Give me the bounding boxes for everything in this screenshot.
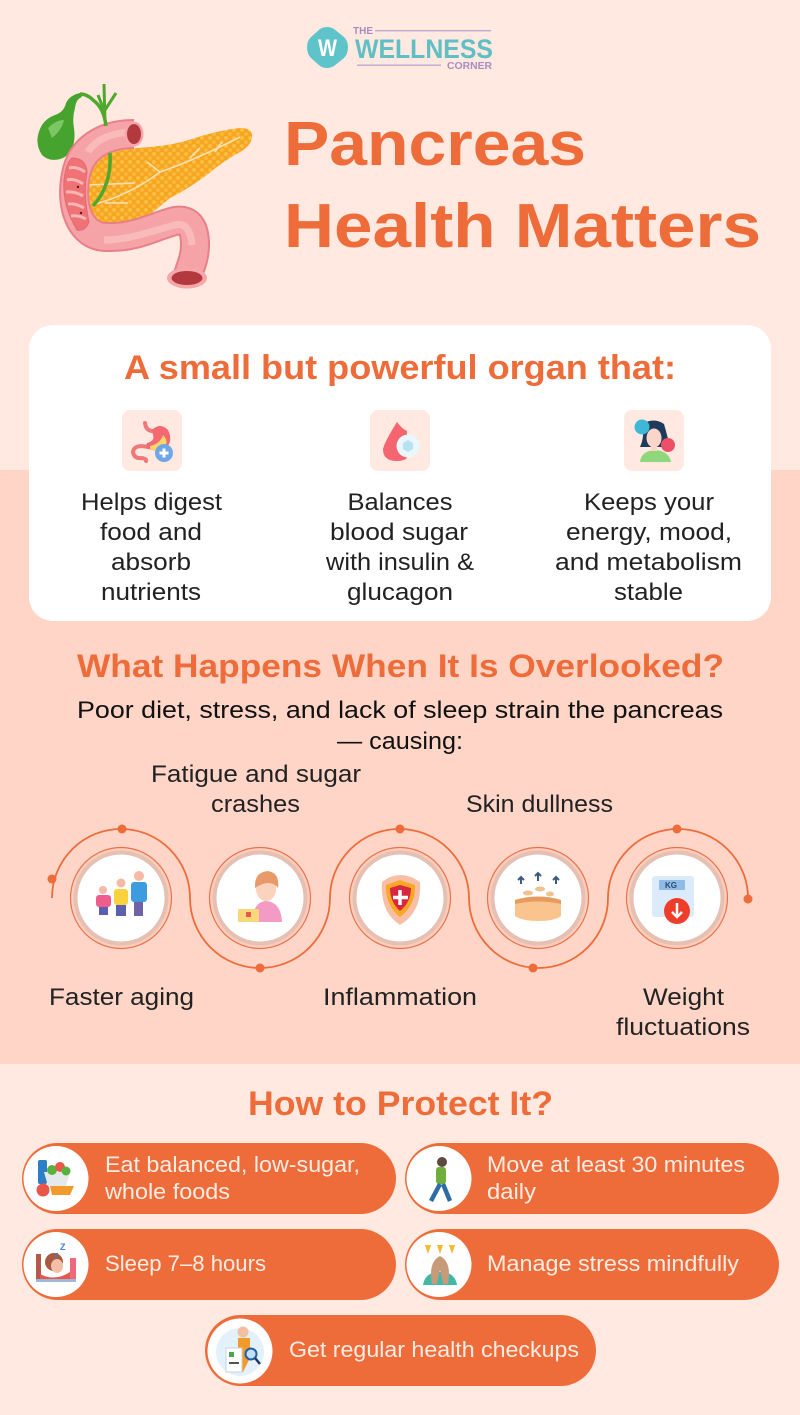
- text: energy: Keeps your: [584, 489, 714, 516]
- labels: effects: Fatigue and sugar: [151, 761, 361, 788]
- text: digest: nutrients: [101, 579, 201, 606]
- icon: walking person: [431, 1157, 450, 1201]
- labels: effects: Inflammation: [323, 984, 477, 1011]
- intro text: — causing:: [337, 728, 463, 755]
- pill: movement: daily: [487, 1179, 536, 1204]
- logo: The Wellness Corner: WELLNESS: [355, 34, 493, 64]
- text: blood sugar: with insulin &: [325, 549, 474, 576]
- pill: balanced foods: whole foods: [104, 1179, 230, 1204]
- labels: effects: crashes: [211, 791, 300, 818]
- icon: sleeping person: [36, 1242, 76, 1282]
- heading: how to protect it: How to Protect It?: [248, 1085, 553, 1123]
- labels: effects: Weight: [643, 984, 724, 1011]
- text: blood sugar: blood sugar: [330, 519, 468, 546]
- text: digest: food and: [100, 519, 202, 546]
- title: Health Matters: [284, 192, 761, 261]
- pill: sleep: Sleep 7–8 hours: [105, 1251, 266, 1276]
- icon: skin dullness: [488, 848, 588, 948]
- pill: sleep: [22, 1229, 396, 1300]
- text: blood sugar: glucagon: [347, 579, 453, 606]
- icon: sleeping person: z: [55, 1252, 59, 1259]
- icon: health checkup: [216, 1326, 264, 1376]
- icon: stressed person: [423, 1245, 457, 1285]
- logo: The Wellness Corner: CORNER: [447, 60, 492, 72]
- text: energy: and metabolism: [555, 549, 742, 576]
- labels: effects: Faster aging: [49, 984, 194, 1011]
- illustration: pancreas with gallbladder and duodenum: [37, 84, 252, 288]
- text: digest: Helps digest: [81, 489, 222, 516]
- icon: woman with mood bubbles: [624, 410, 684, 471]
- pill: checkups: [205, 1315, 596, 1386]
- intro text: Poor diet, stress, and lack of sleep strain the pancreas: [77, 697, 723, 724]
- intro text: [77, 697, 723, 755]
- pill: movement: [405, 1143, 779, 1214]
- icon: blood drop: [370, 410, 430, 471]
- pill: movement: Move at least 30 minutes: [487, 1152, 745, 1177]
- text: energy: [555, 489, 742, 606]
- text: energy: stable: [614, 579, 683, 606]
- text: digest: absorb: [111, 549, 191, 576]
- pill: balanced foods: Eat balanced, low-sugar,: [105, 1152, 360, 1177]
- icon: fatigue: [210, 848, 310, 948]
- labels: effects: Skin dullness: [466, 791, 613, 818]
- icon: healthy food: [36, 1160, 74, 1196]
- heading: what happens when overlooked: What Happens When It Is Overlooked?: [77, 648, 724, 684]
- labels: effects: fluctuations: [616, 1014, 750, 1041]
- pill: checkups: Get regular health checkups: [289, 1337, 579, 1362]
- logo: The Wellness Corner: W: [318, 35, 337, 62]
- text: energy: energy, mood,: [566, 519, 732, 546]
- labels: effects: [49, 761, 750, 1041]
- pill: balanced foods: [22, 1143, 396, 1214]
- logo: The Wellness Corner: [307, 26, 493, 72]
- text: blood sugar: [325, 489, 474, 606]
- pill: stress: [405, 1229, 779, 1300]
- icon: sleeping person: Z: [60, 1242, 66, 1252]
- icon: weight scale: KG: [665, 881, 677, 890]
- icon: inflammation shield: [350, 848, 450, 948]
- text: blood sugar: Balances: [348, 489, 452, 516]
- heading: small but powerful: A small but powerful organ that:: [124, 349, 676, 387]
- icon: stomach: [122, 410, 182, 471]
- wave line: [52, 829, 748, 968]
- title: [284, 110, 761, 261]
- icon: weight scale: [626, 848, 728, 948]
- text: digest: [81, 489, 222, 606]
- pill: stress: Manage stress mindfully: [487, 1251, 739, 1276]
- panel: small but powerful organ: [29, 325, 771, 621]
- title: Pancreas: [284, 110, 586, 179]
- wave dots: [48, 824, 752, 972]
- chart: wave timeline of effects: [48, 761, 752, 1041]
- logo: The Wellness Corner: THE: [353, 26, 373, 37]
- icon: people aging: [70, 848, 172, 948]
